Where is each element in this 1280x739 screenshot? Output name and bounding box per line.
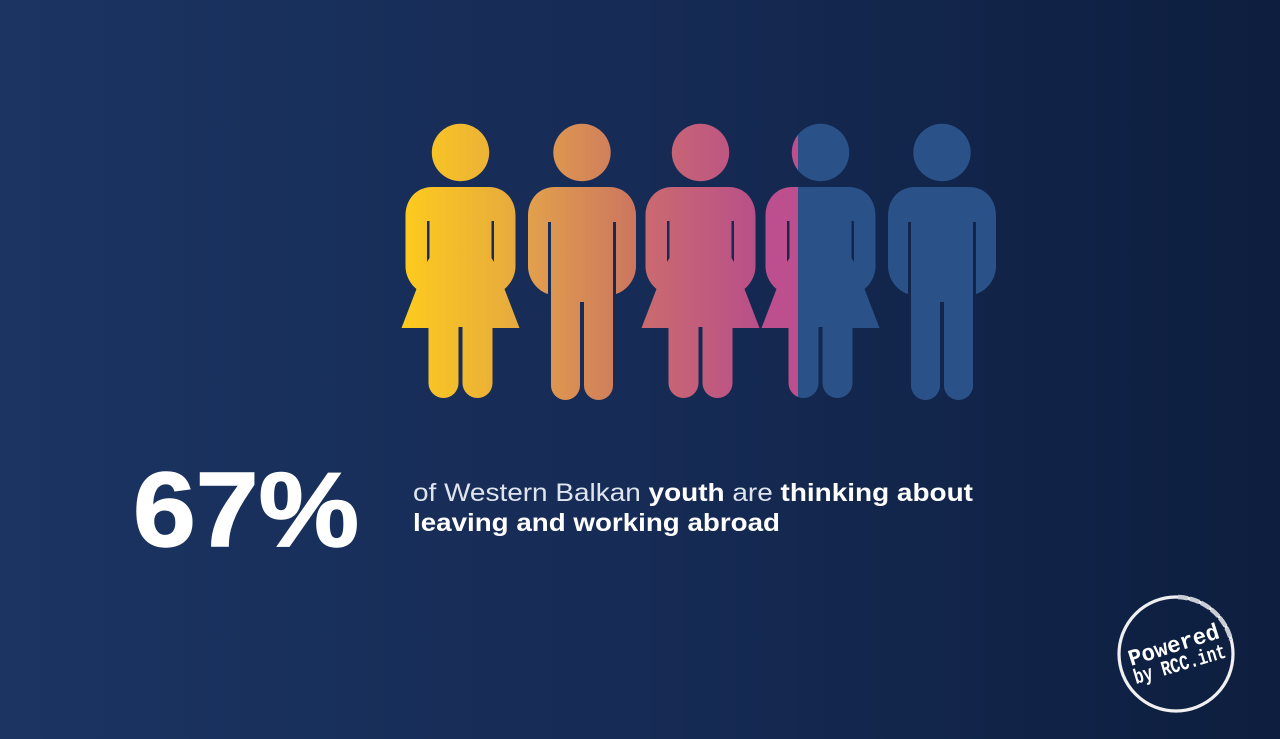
- stamp: Powered by RCC.int: Powered: [1125, 620, 1223, 673]
- icon: person 3, woman, rose: [642, 124, 760, 398]
- description text: [413, 479, 974, 537]
- stamp: Powered by RCC.int: by RCC.int: [1131, 642, 1229, 691]
- description text: leaving and working abroad: [413, 509, 780, 537]
- pictogram row: five people, 67% coloured: [402, 124, 996, 400]
- big statistic: 67%: 67%: [133, 451, 359, 569]
- icon: person 2, man, orange: [528, 124, 636, 400]
- icon: person 5, man, blue: [888, 124, 996, 400]
- icon: person 4, woman, part pink and part blue: [762, 124, 880, 398]
- stamp: Powered by RCC.int: [1119, 597, 1233, 711]
- description text: of Western Balkan youth are thinking about: [413, 479, 974, 507]
- icon: person 1, woman, yellow: [402, 124, 520, 398]
